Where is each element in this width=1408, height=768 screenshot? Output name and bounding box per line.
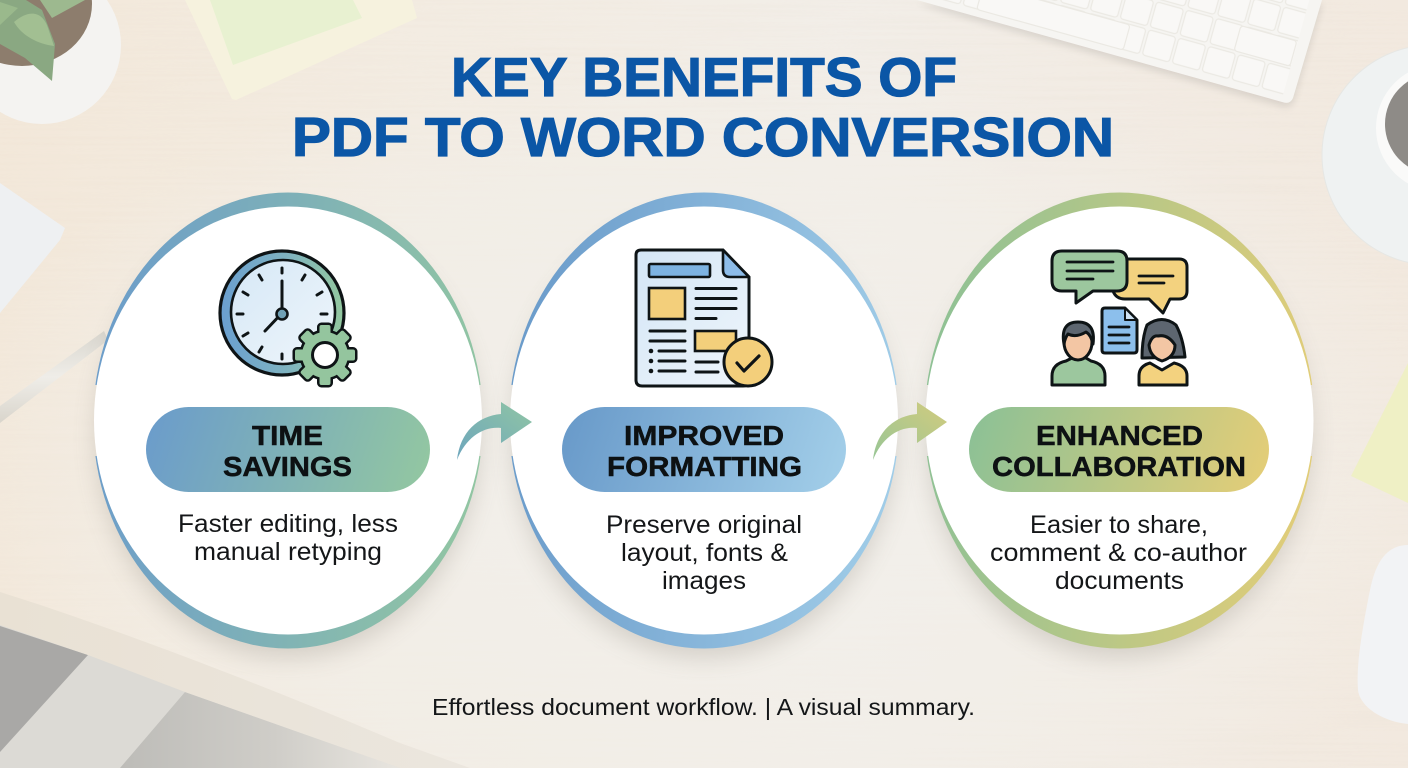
icon: two people chatting over a document xyxy=(1052,251,1187,385)
description: improved formatting: Preserve original xyxy=(606,511,802,539)
keyboard xyxy=(917,0,1322,107)
notebook at left edge xyxy=(0,183,65,313)
icon: document with check xyxy=(636,250,772,386)
heading pill: enhanced collaboration xyxy=(969,407,1269,492)
arrow: improved formatting to enhanced collaboration xyxy=(873,402,947,460)
footer caption: Effortless document workflow. | A visual summary. xyxy=(432,694,975,720)
notepad with green sticky note xyxy=(185,0,417,100)
description: improved formatting xyxy=(606,511,802,595)
coffee cup on saucer xyxy=(1322,45,1408,265)
icon: clock with gear xyxy=(220,251,355,385)
description: time savings: Faster editing, less xyxy=(178,510,398,538)
description: improved formatting: layout, fonts & xyxy=(621,539,788,567)
title: KEY BENEFITS OF xyxy=(451,46,957,108)
heading pill: improved formatting: FORMATTING xyxy=(607,451,802,482)
description: time savings: manual retyping xyxy=(194,538,382,566)
heading pill: improved formatting: IMPROVED xyxy=(624,420,784,451)
heading pill: time savings: SAVINGS xyxy=(223,451,352,482)
yellow sticky note at right edge xyxy=(1351,363,1408,503)
heading pill: time savings xyxy=(146,407,430,492)
panel: improved formatting xyxy=(509,192,899,658)
panel: enhanced collaboration xyxy=(924,192,1314,658)
arrow: time savings to improved formatting xyxy=(457,402,532,460)
heading pill: enhanced collaboration: ENHANCED xyxy=(1036,420,1203,451)
title xyxy=(292,46,1114,168)
pen xyxy=(0,331,108,423)
description: time savings xyxy=(178,510,398,566)
description: enhanced collaboration xyxy=(990,511,1247,595)
description: enhanced collaboration: comment & co-author xyxy=(990,539,1247,567)
desk front edge xyxy=(0,592,470,768)
floor below the desk xyxy=(0,622,420,768)
description: improved formatting: images xyxy=(662,567,746,595)
computer mouse xyxy=(1358,545,1408,724)
plant pot xyxy=(0,0,121,124)
panel: time savings xyxy=(93,192,483,658)
description: enhanced collaboration: documents xyxy=(1055,567,1184,595)
title: PDF TO WORD CONVERSION xyxy=(292,106,1114,168)
heading pill: enhanced collaboration: COLLABORATION xyxy=(992,451,1246,482)
heading pill: time savings: TIME xyxy=(252,420,323,451)
description: enhanced collaboration: Easier to share, xyxy=(1030,511,1208,539)
heading pill: improved formatting xyxy=(562,407,846,492)
